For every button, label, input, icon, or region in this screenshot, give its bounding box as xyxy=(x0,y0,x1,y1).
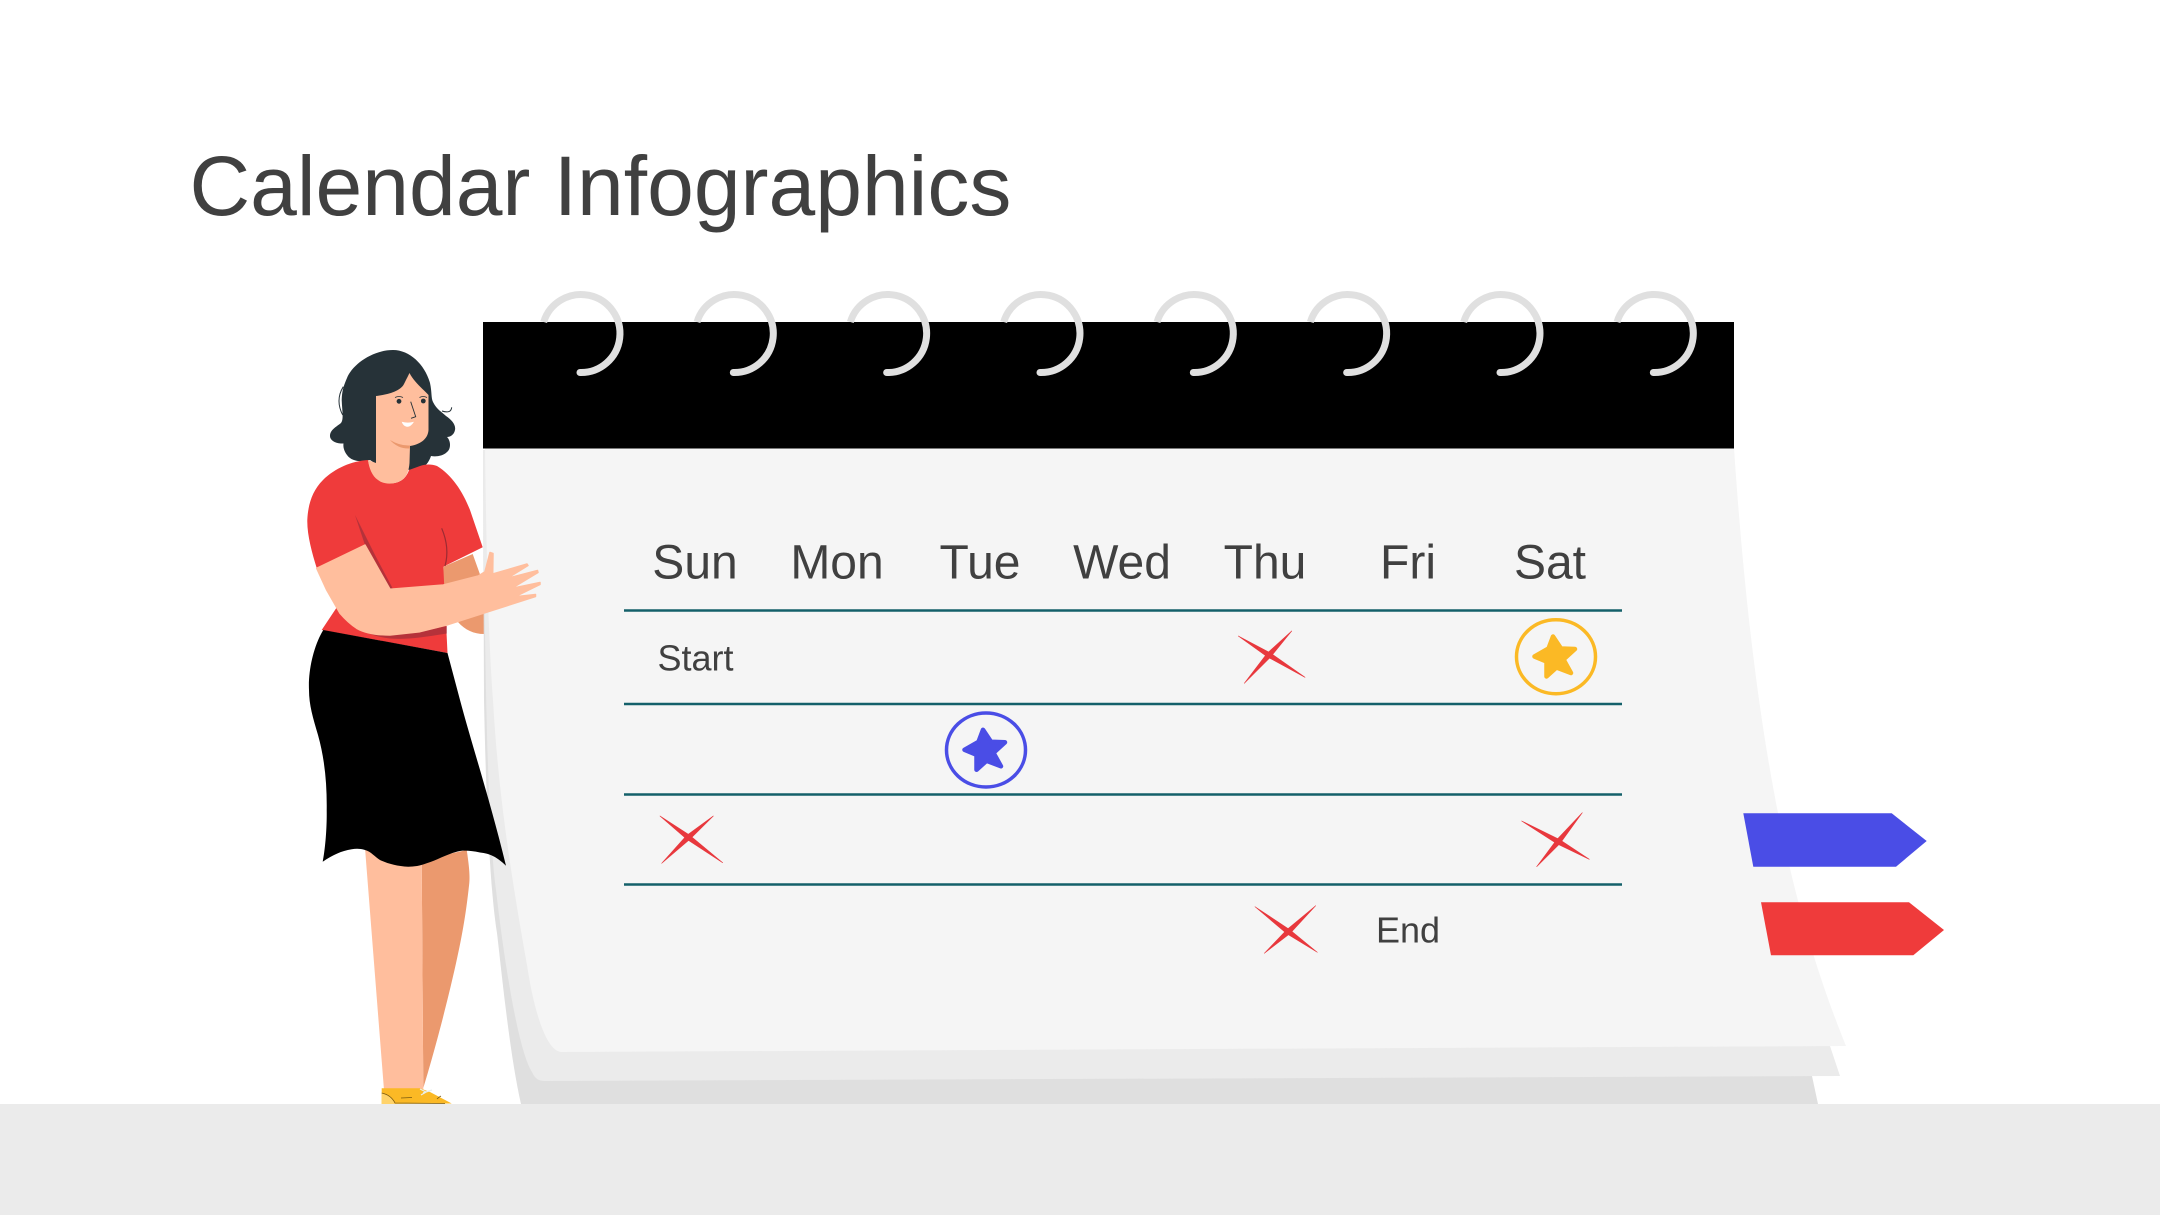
weekday labels: Tue xyxy=(940,536,1020,590)
cross: row 4 Thu xyxy=(1255,906,1317,953)
floor xyxy=(0,1104,2160,1215)
weekday labels: Sat xyxy=(1514,536,1586,590)
front arm and hand xyxy=(317,545,540,635)
middle page xyxy=(483,450,1840,1081)
ring 5 xyxy=(1157,295,1233,376)
chin shadow xyxy=(390,440,410,449)
red shirt xyxy=(307,460,483,653)
ring 4 xyxy=(1004,295,1080,376)
ring 8 xyxy=(1617,295,1693,376)
black skirt xyxy=(309,630,506,867)
face and neck xyxy=(368,373,428,484)
start label: Start xyxy=(657,638,734,678)
back forearm behind calendar xyxy=(443,554,484,634)
shirt shadows xyxy=(340,515,447,639)
ring 1 xyxy=(544,295,620,376)
eyes, nose and smile xyxy=(395,396,427,427)
yellow shoe xyxy=(382,1088,452,1104)
weekday labels: Thu xyxy=(1224,536,1306,590)
front leg xyxy=(365,848,423,1090)
blue star badge xyxy=(946,713,1026,787)
front page xyxy=(485,448,1846,1052)
red flag tab xyxy=(1761,902,1944,955)
gold star badge xyxy=(1516,620,1596,694)
title: Calendar Infographics xyxy=(190,139,1011,233)
back leg xyxy=(422,850,470,1088)
ring 3 xyxy=(850,295,927,376)
spiral rings xyxy=(544,295,1693,376)
ring 6 xyxy=(1310,295,1387,376)
woman figure xyxy=(307,350,540,1104)
cross: row 3 Sat xyxy=(1522,813,1589,867)
hair xyxy=(330,350,455,470)
weekday labels xyxy=(652,536,1586,590)
blue flag tab xyxy=(1743,813,1927,867)
cross: row 3 Sun xyxy=(660,816,723,863)
ring 7 xyxy=(1464,295,1540,376)
weekday labels: Wed xyxy=(1073,536,1171,590)
end label: End xyxy=(1376,910,1440,950)
weekday labels: Mon xyxy=(790,536,884,590)
weekday labels: Fri xyxy=(1380,536,1436,590)
ring 2 xyxy=(697,295,773,376)
header band xyxy=(483,322,1734,448)
calendar xyxy=(483,295,1846,1104)
cross: row 1 Thu xyxy=(1238,631,1305,683)
weekday labels: Sun xyxy=(652,536,738,590)
back page xyxy=(483,450,1818,1104)
